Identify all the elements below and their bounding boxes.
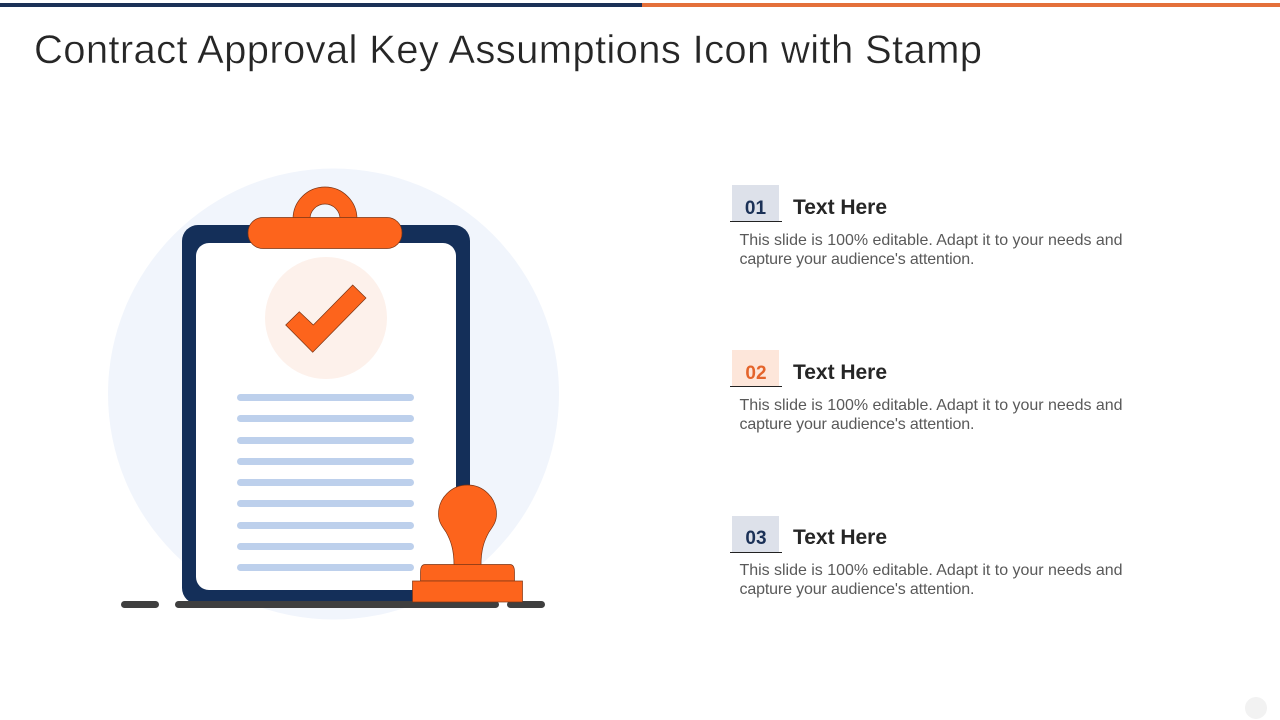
body text 02 [740, 397, 1122, 433]
number badge 03: 03 [745, 528, 767, 549]
heading 02: Text Here [793, 361, 887, 384]
illustration: clipboard with approval stamp [108, 168, 559, 620]
body text 01: capture your audience's attention. [740, 251, 974, 268]
body text 02: This slide is 100% editable. Adapt it to your needs and [740, 397, 1122, 414]
page marker circle [1245, 697, 1267, 719]
number badge 02 [730, 350, 782, 387]
body text 02: capture your audience's attention. [740, 416, 974, 433]
background circle [108, 168, 559, 620]
heading 03: Text Here [793, 526, 887, 549]
item 02 [730, 350, 1122, 433]
icon: rubber stamp [412, 485, 522, 602]
item 03 [730, 516, 1122, 598]
title: Contract Approval Key Assumptions Icon with Stamp [34, 28, 982, 72]
body text 03 [740, 562, 1122, 598]
body text 03: capture your audience's attention. [740, 581, 974, 598]
icon: check mark in circle [265, 257, 387, 379]
item 01 [730, 185, 1122, 268]
number badge 03 [730, 516, 782, 553]
document text lines [237, 394, 414, 571]
body text 01 [740, 232, 1122, 268]
top accent bar [0, 3, 1280, 7]
number badge 02: 02 [745, 363, 767, 384]
number badge 01 [730, 185, 782, 222]
body text 03: This slide is 100% editable. Adapt it to your needs and [740, 562, 1122, 579]
number badge 01: 01 [745, 198, 766, 219]
body text 01: This slide is 100% editable. Adapt it to your needs and [740, 232, 1122, 249]
clipboard board [182, 225, 470, 604]
clipboard clip [248, 187, 402, 248]
heading 01: Text Here [793, 196, 887, 219]
paper sheet [196, 243, 456, 590]
ground line [121, 601, 545, 608]
